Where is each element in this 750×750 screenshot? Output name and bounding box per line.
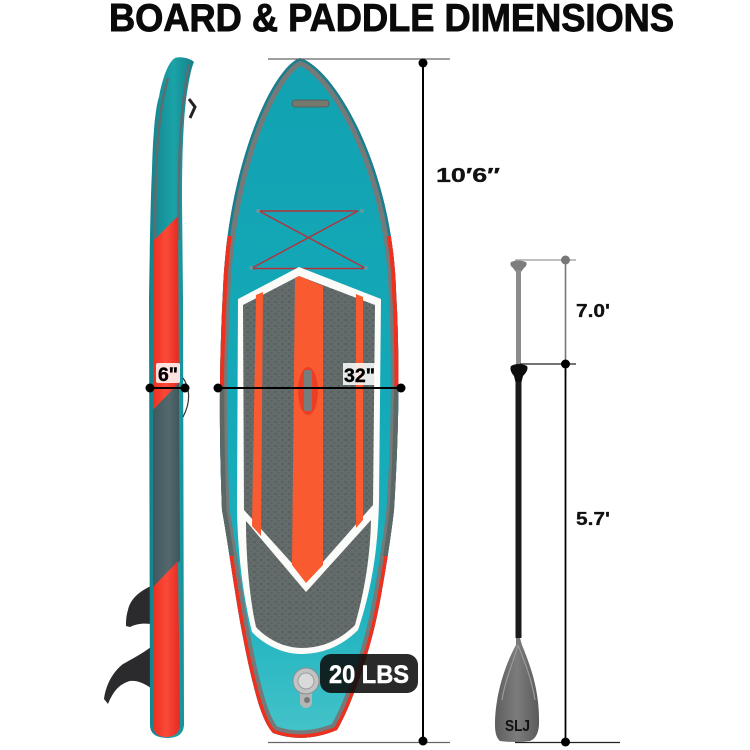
paddle blade [495,638,539,742]
blade logo: SLJ [505,718,530,735]
icon: rear fins [104,586,151,704]
board width dimension [214,363,406,392]
upper red panel [153,216,179,410]
centre carry handle [298,367,318,415]
lower shaft [516,382,522,638]
lower section label: 5.7' [576,509,610,529]
length label: 10′6″ [436,165,501,187]
side board body [149,57,194,738]
blade centre rib [502,645,535,700]
top view of board [220,58,398,738]
grey rim [220,58,398,738]
side board rail stripe [155,64,189,240]
nose carry handle [292,100,329,107]
leash line [183,378,189,417]
paddle [495,260,539,742]
bungee tie-down cords [249,209,368,270]
side view of board [104,57,195,738]
centre orange stripe [292,276,323,583]
upper section label: 7.0' [576,301,610,321]
lower deck pad [246,520,371,648]
paddle T-grip [510,260,527,272]
icon: side handle [189,99,195,118]
upper shaft [516,270,521,366]
weight badge [320,654,418,693]
weight badge: 20 LBS [329,661,409,689]
left orange stripe [252,292,263,536]
right orange stripe [356,294,363,528]
paddle length dimension [515,256,620,746]
red and grey rail sections [220,236,398,738]
grey middle panel [153,383,180,587]
deck pad white border [237,267,381,654]
lower red panel [153,561,180,737]
teal deck [220,58,398,738]
inflation valve [293,668,319,708]
outer rail [220,58,398,738]
thickness label: 6" [158,365,178,386]
upper deck pad [243,276,375,580]
adjustment clamp [510,364,528,384]
board thickness dimension [146,363,190,392]
board length dimension [268,58,501,746]
width label: 32" [344,366,375,387]
